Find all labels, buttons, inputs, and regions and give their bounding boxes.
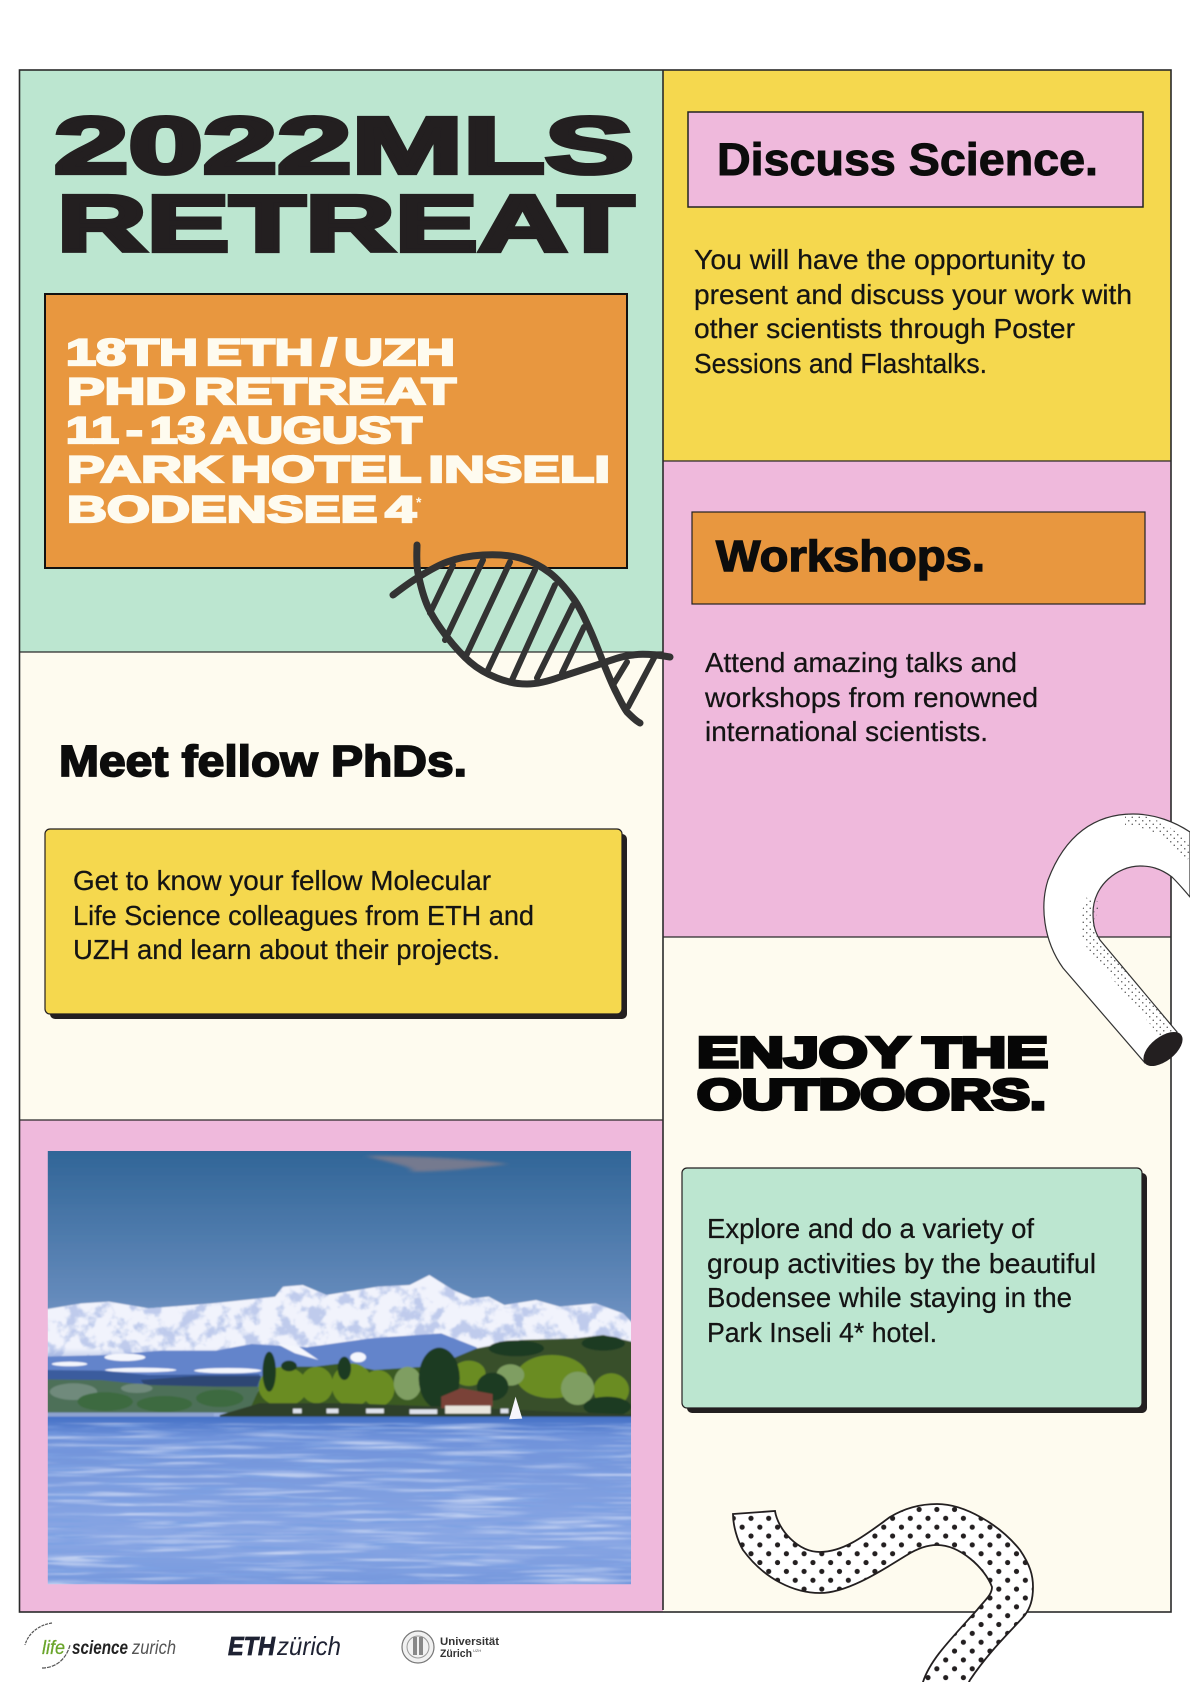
panel: workshops heading: [692, 512, 1145, 604]
panel: enjoy the outdoors background: [663, 937, 1171, 1612]
text: discuss science description: other scientists through Poster: [694, 313, 1075, 344]
text: workshops description: international scientists.: [705, 716, 988, 747]
panel: event details: [45, 294, 627, 568]
panel: discuss science heading: [688, 112, 1143, 207]
panel: meet fellow PhDs text: UZH and learn about their projects.: [73, 934, 500, 965]
panel: event details: 11 - 13 AUGUST: [66, 410, 423, 451]
photo: Bodensee with Alps: [42, 1147, 639, 1590]
text: workshops description: [704, 647, 1038, 747]
heading: enjoy the outdoors: [697, 1029, 1048, 1119]
text: discuss science description: [694, 244, 1132, 379]
panel: meet fellow PhDs text: Get to know your fellow Molecular: [73, 865, 491, 896]
text: discuss science description: Sessions and Flashtalks.: [694, 348, 987, 379]
title: 2022MLS: [54, 101, 634, 190]
logo: Universität Zürich: Universität: [440, 1636, 499, 1648]
icon: dotted squiggle: [733, 1504, 1033, 1682]
panel: outdoors text: Explore and do a variety of: [707, 1213, 1034, 1244]
logo: ETH zurich: [228, 1631, 341, 1661]
logo: life science zurich: zurich: [131, 1638, 176, 1659]
panel: discuss science heading: Discuss Science.: [717, 134, 1098, 185]
logo: life science zurich: [25, 1623, 176, 1668]
text: workshops description: workshops from renowned: [704, 682, 1038, 713]
panel: discuss science background: [663, 70, 1171, 461]
heading: meet fellow PhDs: Meet fellow PhDs.: [59, 737, 467, 786]
panel: event details: PHD RETREAT: [67, 371, 457, 412]
panel: meet fellow PhDs background: [20, 652, 664, 1120]
text: workshops description: Attend amazing talks and: [705, 647, 1017, 678]
panel: workshops heading: Workshops.: [716, 532, 985, 581]
logo: life science zurich: life: [42, 1638, 65, 1659]
logo: life science zurich: science: [72, 1638, 128, 1659]
panel: photo background: [20, 1120, 664, 1612]
panel: meet fellow PhDs text: Life Science colleagues from ETH and: [73, 900, 534, 931]
title: RETREAT: [57, 179, 634, 268]
heading: enjoy the outdoors: OUTDOORS.: [697, 1071, 1046, 1119]
panel: outdoors text: group activities by the beautiful: [707, 1248, 1096, 1279]
logo: Universität Zürich: [402, 1631, 499, 1663]
icon: DNA strand: [393, 545, 670, 723]
panel: meet fellow PhDs text: [45, 829, 627, 1019]
panel: event details: BODENSEE 4: [67, 489, 417, 530]
panel: title background: [20, 70, 664, 652]
logo: Universität Zürich: UZH: [473, 1648, 481, 1653]
title: [54, 101, 634, 268]
logo: ETH zurich: ETH: [228, 1631, 276, 1661]
text: discuss science description: You will have the opportunity to: [694, 244, 1086, 275]
panel: event details: PARK HOTEL INSELI: [67, 449, 610, 490]
text: discuss science description: present and discuss your work with: [694, 279, 1132, 310]
panel: outdoors text: Park Inseli 4* hotel.: [707, 1317, 937, 1348]
logo: ETH zurich: zürich: [276, 1631, 341, 1661]
icon: curved tube: [1044, 814, 1190, 1073]
panel: outdoors text: [682, 1168, 1147, 1413]
panel: workshops background: [663, 461, 1171, 937]
heading: enjoy the outdoors: ENJOY THE: [697, 1029, 1048, 1077]
panel: event details: *: [416, 494, 422, 510]
logo: Universität Zürich: Zürich: [440, 1648, 472, 1660]
panel: event details: 18TH ETH / UZH: [66, 332, 455, 373]
panel: outdoors text: Bodensee while staying in the: [707, 1282, 1072, 1313]
